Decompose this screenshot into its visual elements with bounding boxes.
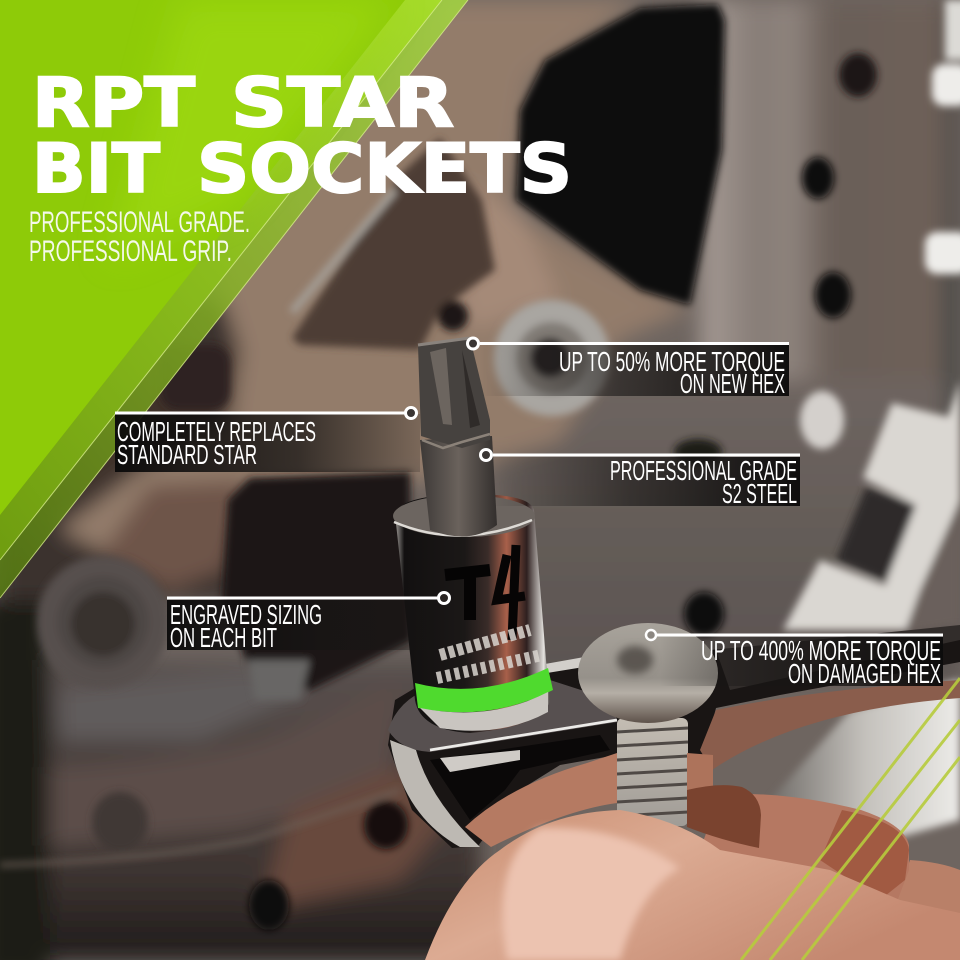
subtitle — [29, 206, 250, 268]
hand: index finger, nail and thumb — [425, 753, 960, 960]
callout: engraved sizing on each bit: ON EACH BIT — [170, 622, 277, 653]
callout: engraved sizing on each bit: ENGRAVED SIZING — [170, 599, 322, 630]
white tabs of the rotor — [783, 380, 960, 630]
callout: engraved sizing on each bit — [167, 592, 450, 653]
star bit — [418, 338, 497, 536]
callout: professional grade S2 steel — [480, 450, 800, 509]
socket with engraved T40 marking — [393, 494, 553, 733]
title — [32, 64, 572, 209]
screw — [578, 623, 718, 826]
callout: professional grade S2 steel: S2 STEEL — [722, 478, 797, 509]
callout: completely replaces standard star: COMPLETELY REPLACES — [117, 416, 316, 447]
subtitle: PROFESSIONAL GRIP. — [29, 235, 232, 268]
subtitle: PROFESSIONAL GRADE. — [29, 206, 250, 239]
callout: up to 400% more torque on damaged hex — [646, 630, 943, 689]
title: RPT — [32, 64, 196, 143]
green diagonal banner — [0, 0, 468, 598]
green grip ring — [415, 668, 553, 712]
callout: up to 50% more torque — [468, 338, 789, 399]
title: SOCKETS — [197, 130, 572, 209]
title: STAR — [231, 64, 454, 143]
callout: completely replaces standard star: STANDARD STAR — [117, 439, 257, 470]
ratchet wrench — [388, 625, 960, 848]
title: BIT — [32, 130, 161, 209]
callout: completely replaces standard star — [115, 408, 420, 472]
callout: up to 50% more torque: ON NEW HEX — [680, 368, 785, 399]
callout: professional grade S2 steel: PROFESSIONAL GRADE — [610, 455, 797, 486]
callout: up to 50% more torque: UP TO 50% MORE TORQUE — [559, 346, 785, 377]
green accent lines — [741, 678, 960, 960]
